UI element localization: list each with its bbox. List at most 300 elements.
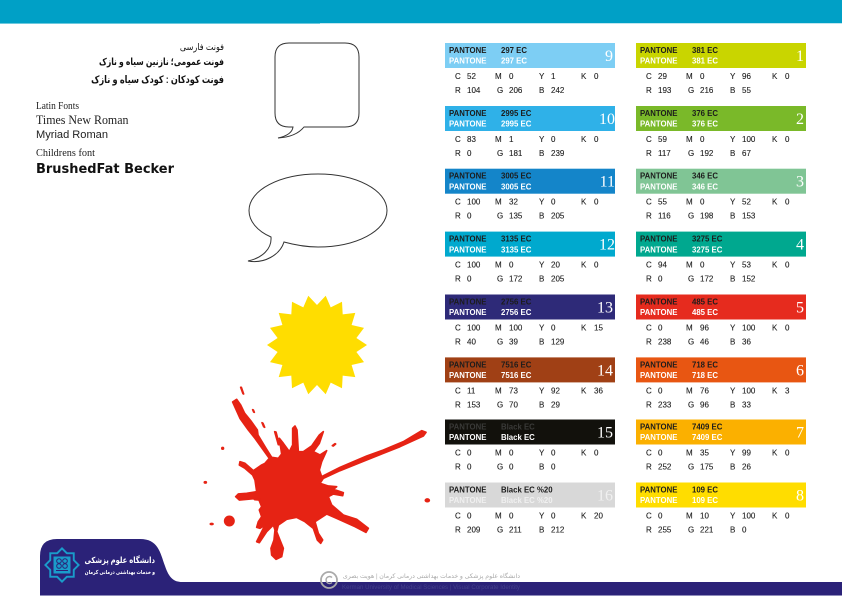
color card 2: 0	[700, 135, 705, 144]
color card 6: M	[686, 386, 693, 395]
color card 4: 172	[700, 275, 714, 284]
color card 6: 718 EC	[692, 371, 718, 380]
color card 15: 15	[597, 424, 613, 442]
color card 3: C	[646, 198, 652, 207]
color card 16: C	[455, 512, 461, 520]
color card 9: PANTONE	[449, 46, 486, 55]
footer text: university name: و خدمات بهداشتی درمانی کرمان	[85, 570, 155, 576]
color card 6: 233	[658, 400, 672, 409]
color card 12: G	[497, 275, 503, 284]
speech bubble: oval	[248, 174, 387, 262]
color card 14: 29	[551, 400, 560, 409]
color card 6: C	[646, 386, 652, 395]
color card 10: B	[539, 149, 544, 158]
color card 8: 221	[700, 526, 714, 534]
color card 3: 0	[785, 198, 790, 207]
color card 4: 94	[658, 261, 667, 270]
color card 4: 4	[796, 237, 804, 254]
color card 13: 39	[509, 338, 518, 346]
color card 14: 70	[509, 400, 518, 409]
color card 5: Y	[730, 324, 736, 332]
color card 9: PANTONE	[449, 57, 486, 66]
color card 7: M	[686, 448, 693, 458]
color card 10: R	[455, 149, 461, 158]
color card 2: 0	[785, 135, 790, 144]
color card 9: 104	[467, 86, 481, 95]
color card 8: 255	[658, 526, 672, 534]
color card 13: M	[495, 324, 502, 332]
color card 15: 0	[467, 462, 472, 472]
color card 6: 100	[742, 386, 756, 395]
color card 4: 0	[785, 261, 790, 270]
color card 2: C	[646, 135, 652, 144]
color card 4: G	[688, 275, 694, 284]
color card 5: 485 EC	[692, 308, 718, 317]
color card 11: 205	[551, 212, 565, 221]
color card 2: PANTONE	[640, 120, 677, 129]
color card 4: 0	[700, 261, 705, 270]
color card 9: 242	[551, 86, 565, 95]
color card 5: 0	[658, 324, 663, 332]
color card 1: B	[730, 86, 735, 95]
color card 16	[445, 482, 615, 534]
color card 4: B	[730, 275, 735, 284]
color card 10: 0	[467, 149, 472, 158]
color card 14: PANTONE	[449, 360, 486, 369]
color card 2: G	[688, 149, 694, 158]
color card 5: K	[772, 324, 778, 332]
color card 14: 11	[467, 386, 476, 395]
color card 2: 100	[742, 135, 756, 144]
color card 6: G	[688, 400, 694, 409]
color card 2: B	[730, 149, 735, 158]
text block: Persian fonts: فونت کودکان : کودک سیاه و نازک	[91, 74, 224, 86]
color card 6	[636, 357, 806, 409]
color card 11: G	[497, 212, 503, 221]
color card 13: 15	[594, 324, 603, 332]
footer text: university name	[85, 555, 155, 576]
color card 1: 29	[658, 72, 667, 81]
color card 16: PANTONE	[449, 486, 486, 494]
color card 7: PANTONE	[640, 433, 677, 442]
color card 4: K	[772, 261, 778, 270]
color card 13: PANTONE	[449, 298, 486, 306]
color card 13: R	[455, 338, 461, 346]
color card 6: 718 EC	[692, 360, 718, 369]
color card 15: 0	[551, 462, 556, 472]
red paint splat	[204, 387, 429, 559]
color card 8	[636, 482, 806, 534]
color card 11: PANTONE	[449, 182, 486, 191]
color card 12: K	[581, 261, 587, 270]
color card 15: R	[455, 462, 461, 472]
color card 14: 7516 EC	[501, 371, 532, 380]
color card 1: PANTONE	[640, 57, 677, 66]
color card 4: 3275 EC	[692, 245, 723, 254]
color card 7: 0	[658, 448, 663, 458]
color card 15: PANTONE	[449, 433, 486, 442]
color card 16: G	[497, 526, 503, 534]
color card 16: 0	[509, 512, 514, 520]
color card 3: R	[646, 212, 652, 221]
color card 1: 193	[658, 86, 672, 95]
color card 14: C	[455, 386, 461, 395]
color card 10: 10	[599, 111, 615, 128]
color card 12: PANTONE	[449, 245, 486, 254]
color card 3	[636, 169, 806, 221]
color card 1: 216	[700, 86, 714, 95]
color card 12: R	[455, 275, 461, 284]
color card 8: 0	[742, 526, 747, 534]
color card 6: R	[646, 400, 652, 409]
color card 2: 192	[700, 149, 714, 158]
color card 3: 0	[700, 198, 705, 207]
color card 6: Y	[730, 386, 736, 395]
color card 9: 1	[551, 72, 556, 81]
color card 13: 0	[551, 324, 556, 332]
color card 5: 46	[700, 338, 709, 346]
color card 2: R	[646, 149, 652, 158]
color card 10: 0	[594, 135, 599, 144]
color card 4: 53	[742, 261, 751, 270]
color card 5: PANTONE	[640, 308, 677, 317]
color card 15: Black EC	[501, 422, 535, 432]
color card 1: 381 EC	[692, 46, 718, 55]
color card 12: M	[495, 261, 502, 270]
color card 15	[445, 420, 615, 472]
color card 4: R	[646, 275, 652, 284]
color card 3: 153	[742, 212, 756, 221]
color card 14: M	[495, 386, 502, 395]
color card 6: PANTONE	[640, 360, 677, 369]
color card 6: K	[772, 386, 778, 395]
color card 12: 0	[509, 261, 514, 270]
color card 6: 96	[700, 400, 709, 409]
color card 9: M	[495, 72, 502, 81]
color card 15: K	[581, 448, 587, 458]
color card 9: 9	[605, 48, 613, 65]
icon: copyright mark	[321, 572, 337, 588]
color card 11: 0	[594, 198, 599, 207]
color card 15: 0	[509, 448, 514, 458]
color card 5: 238	[658, 338, 672, 346]
color card 9: Y	[539, 72, 545, 81]
text block: Latin fonts: Myriad Roman	[36, 129, 108, 141]
color card 12: 0	[467, 275, 472, 284]
color card 16: Y	[539, 512, 545, 520]
color card 13: 100	[509, 324, 523, 332]
color card 11: 0	[467, 212, 472, 221]
color card 9: G	[497, 86, 503, 95]
color card 15: Y	[539, 448, 545, 458]
color card 14: PANTONE	[449, 371, 486, 380]
color card 5: 0	[785, 324, 790, 332]
color card 11: 100	[467, 198, 481, 207]
color card 7: 7409 EC	[692, 422, 723, 432]
color card 14: 36	[594, 386, 603, 395]
color card 12: 12	[599, 237, 615, 254]
color card 16: K	[581, 512, 587, 520]
color card 10: 239	[551, 149, 565, 158]
color card 15: 0	[551, 448, 556, 458]
color card 15: Black EC	[501, 433, 535, 442]
color card 14: Y	[539, 386, 545, 395]
color card 5: 5	[796, 300, 804, 316]
color card 9: 0	[594, 72, 599, 81]
color card 9: C	[455, 72, 461, 81]
color card 12: 100	[467, 261, 481, 270]
color card 12: PANTONE	[449, 235, 486, 244]
color card 13: 2756 EC	[501, 298, 532, 306]
color card 3: 52	[742, 198, 751, 207]
color card 4: Y	[730, 261, 736, 270]
color card 8: Y	[730, 512, 736, 520]
color card 8: 100	[742, 512, 756, 520]
color card 6: 33	[742, 400, 751, 409]
color card 2: 59	[658, 135, 667, 144]
color card 7: 0	[785, 448, 790, 458]
color card 15: C	[455, 448, 461, 458]
color card 10: K	[581, 135, 587, 144]
color card 9: R	[455, 86, 461, 95]
color card 6: 6	[796, 362, 804, 379]
color card 5: 96	[700, 324, 709, 332]
color card 5: G	[688, 338, 694, 346]
color card 8: K	[772, 512, 778, 520]
color card 2: M	[686, 135, 693, 144]
color card 12: B	[539, 275, 544, 284]
color card 10: 0	[551, 135, 556, 144]
color card 9: K	[581, 72, 587, 81]
color card 10: Y	[539, 135, 545, 144]
color card 9: B	[539, 86, 544, 95]
color card 3: PANTONE	[640, 182, 677, 191]
color card 7: 175	[700, 462, 714, 472]
color card 4: C	[646, 261, 652, 270]
color card 3: 346 EC	[692, 182, 718, 191]
footer text: university name: دانشگاه علوم پزشکی	[85, 555, 155, 565]
color card 3: 3	[796, 174, 804, 191]
color card 4: PANTONE	[640, 245, 677, 254]
color card 16: 209	[467, 526, 481, 534]
color card 1: PANTONE	[640, 46, 677, 55]
text block: Persian fonts	[91, 41, 224, 86]
color card 11: 3005 EC	[501, 182, 532, 191]
color card 4: 3275 EC	[692, 235, 723, 244]
color card 7: 7	[796, 424, 804, 442]
color card 11: R	[455, 212, 461, 221]
color card 3: B	[730, 212, 735, 221]
color card 16: B	[539, 526, 544, 534]
color card 16: 211	[509, 526, 522, 534]
color card 10: 181	[509, 149, 523, 158]
color card 13: K	[581, 324, 587, 332]
color card 1: G	[688, 86, 694, 95]
color card 12: 3135 EC	[501, 235, 532, 244]
color card 4: PANTONE	[640, 235, 677, 244]
color card 13: 13	[597, 300, 613, 316]
color card 13: Y	[539, 324, 545, 332]
color card 7: R	[646, 462, 652, 472]
color card 3: 198	[700, 212, 714, 221]
color card 14	[445, 357, 615, 409]
color card 2: 376 EC	[692, 120, 718, 129]
color card 11: 3005 EC	[501, 172, 532, 181]
color card 5: 36	[742, 338, 751, 346]
color card 1: 55	[742, 86, 751, 95]
color card 3: G	[688, 212, 694, 221]
color card 16: 20	[594, 512, 603, 520]
color card 7: 35	[700, 448, 709, 458]
color card 14: G	[497, 400, 503, 409]
text block: Latin fonts: Childrens font	[36, 148, 95, 159]
color card 15: M	[495, 448, 502, 458]
color card 8: 8	[796, 488, 804, 504]
color card 6: B	[730, 400, 735, 409]
footer watermark text: Kerman University of Medical Sciences | Visual Corporate Identity	[342, 585, 520, 591]
color card 15: 0	[594, 448, 599, 458]
color card 5: 100	[742, 324, 756, 332]
color card 7: 26	[742, 462, 751, 472]
color card 7: Y	[730, 448, 736, 458]
color card 2: PANTONE	[640, 109, 677, 118]
color card 6: 3	[785, 386, 790, 395]
color card 1: 0	[785, 72, 790, 81]
color card 1: M	[686, 72, 693, 81]
color card 7: 99	[742, 448, 751, 458]
color card 11: 0	[551, 198, 556, 207]
color card 14: R	[455, 400, 461, 409]
color card 8: R	[646, 526, 652, 534]
color card 13: 129	[551, 338, 565, 346]
color card 13: C	[455, 324, 461, 332]
color card 10: 2995 EC	[501, 120, 532, 129]
color card 3: Y	[730, 198, 736, 207]
color card 11: M	[495, 198, 502, 207]
color card 10	[445, 106, 615, 158]
icon: university logo	[44, 547, 80, 583]
color card 9: 297 EC	[501, 46, 527, 55]
color card 12: C	[455, 261, 461, 270]
color card 13: B	[539, 338, 544, 346]
color card 3: K	[772, 198, 778, 207]
color card 14: 7516 EC	[501, 360, 532, 369]
color card 5: C	[646, 324, 652, 332]
color card 7	[636, 420, 806, 472]
color card 11	[445, 169, 615, 221]
color card 11: K	[581, 198, 587, 207]
color card 13: G	[497, 338, 503, 346]
color card 6: PANTONE	[640, 371, 677, 380]
color card 1: 1	[796, 48, 804, 65]
color card 3: 116	[658, 212, 671, 221]
color card 1: 96	[742, 72, 751, 81]
color card 12: 205	[551, 275, 565, 284]
color card 12: 172	[509, 275, 523, 284]
color card 16: 16	[597, 488, 613, 504]
color card 10: 2995 EC	[501, 109, 532, 118]
color card 1: 0	[700, 72, 705, 81]
color card 9	[445, 43, 615, 95]
color card 11: C	[455, 198, 461, 207]
color card 14: 153	[467, 400, 481, 409]
color card 2: K	[772, 135, 778, 144]
color card 2	[636, 106, 806, 158]
color card 5	[636, 294, 806, 346]
color card 3: 55	[658, 198, 667, 207]
color card 15: 0	[509, 462, 514, 472]
color card 13: 100	[467, 324, 481, 332]
color card 12: 20	[551, 261, 560, 270]
color card 1: 381 EC	[692, 57, 718, 66]
color card 12	[445, 232, 615, 284]
color card 2: 2	[796, 111, 804, 128]
color card 10: PANTONE	[449, 109, 486, 118]
color card 8: 10	[700, 512, 709, 520]
color card 14: K	[581, 386, 587, 395]
color card 15: 0	[467, 448, 472, 458]
color card 12: 0	[594, 261, 599, 270]
text block: Persian fonts: فونت فارسی	[180, 41, 224, 52]
color card 2: 376 EC	[692, 109, 718, 118]
color card 15: G	[497, 462, 503, 472]
color card 12: Y	[539, 261, 545, 270]
color card 14: 73	[509, 386, 518, 395]
color card 8: M	[686, 512, 693, 520]
color card 7: C	[646, 448, 652, 458]
color card 10: PANTONE	[449, 120, 486, 129]
color card 9: 0	[509, 72, 514, 81]
color card 8: 0	[658, 512, 663, 520]
color card 7: G	[688, 462, 694, 472]
color card 8: 109 EC	[692, 496, 718, 505]
color card 14: 92	[551, 386, 560, 395]
footer band with logo tab	[40, 539, 842, 596]
color card 14: 14	[597, 362, 613, 379]
color card 16: 212	[551, 526, 565, 534]
color card 5: B	[730, 338, 735, 346]
color card 2: Y	[730, 135, 736, 144]
color card 5: M	[686, 324, 693, 332]
color card 11: 11	[600, 174, 615, 191]
color card 9: 297 EC	[501, 57, 527, 66]
footer watermark text: دانشگاه علوم پزشکی و خدمات بهداشتی درمانی کرمان | هویت بصری	[343, 572, 520, 580]
color card 8: 109 EC	[692, 486, 718, 494]
color card 16: 0	[467, 512, 472, 520]
color card 4	[636, 232, 806, 284]
color card 3: M	[686, 198, 693, 207]
color card 13: PANTONE	[449, 308, 486, 317]
color card 8: PANTONE	[640, 486, 677, 494]
color card 8: 0	[785, 512, 790, 520]
text block: Latin fonts: Latin Fonts	[36, 101, 79, 112]
color card 10: G	[497, 149, 503, 158]
color card 7: K	[772, 448, 778, 458]
color card 15: B	[539, 462, 544, 472]
color card 9: 52	[467, 72, 476, 81]
color card 11: 135	[509, 212, 523, 221]
color card 1: K	[772, 72, 778, 81]
header bar	[0, 0, 842, 24]
color card 16: Black EC %20	[501, 486, 553, 494]
color card 14: B	[539, 400, 544, 409]
color card 7: 7409 EC	[692, 433, 723, 442]
color card 10: C	[455, 135, 461, 144]
color card 1: R	[646, 86, 652, 95]
color card 11: Y	[539, 198, 545, 207]
color card 5: R	[646, 338, 652, 346]
color card 16: 0	[551, 512, 556, 520]
